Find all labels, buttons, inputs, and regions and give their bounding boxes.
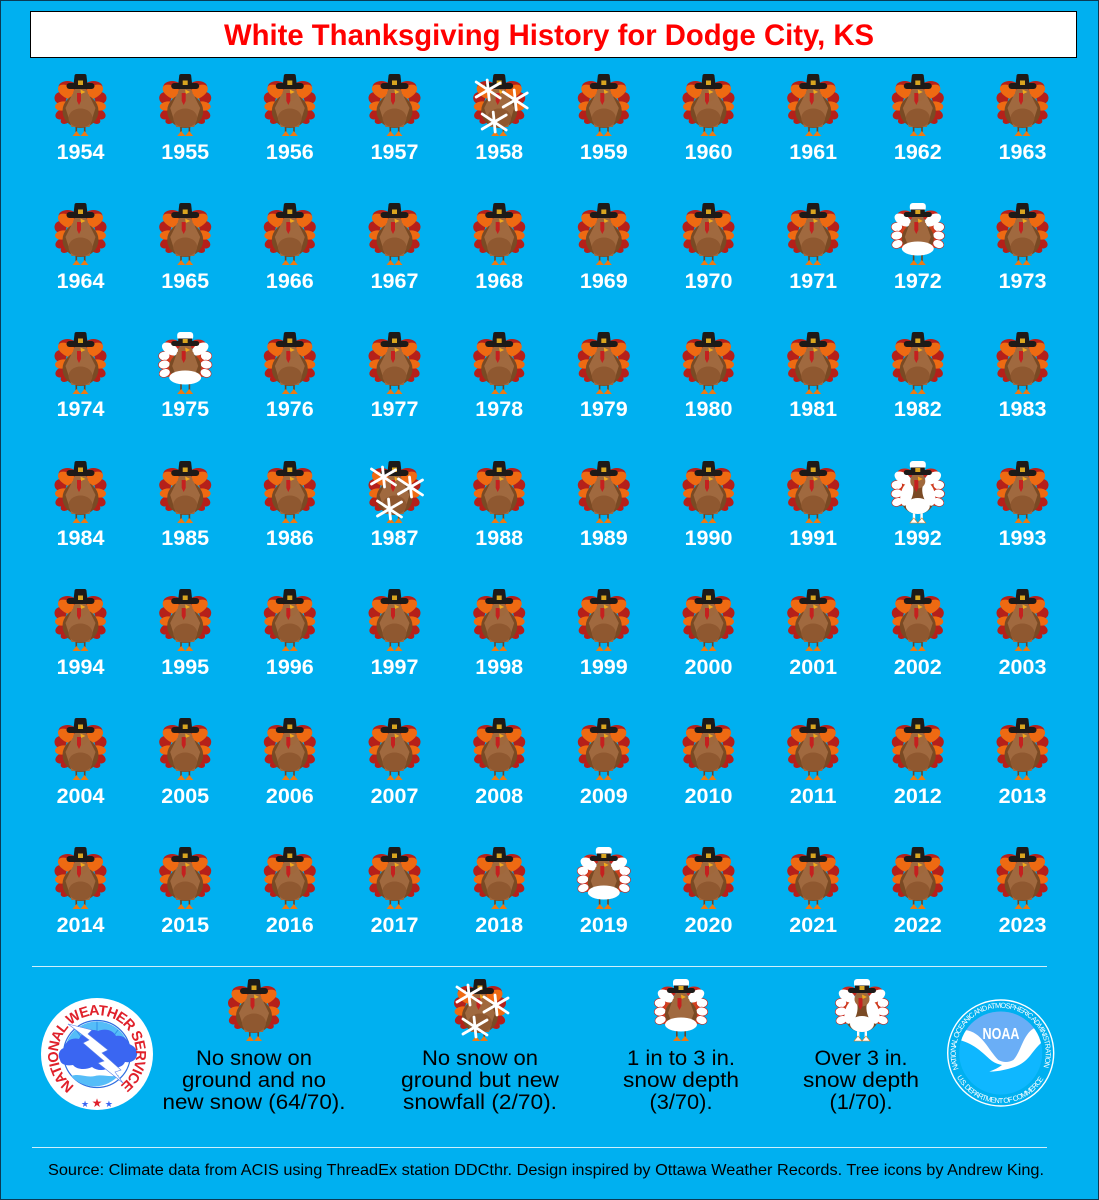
2006 no snow: 2006: [266, 784, 314, 808]
2008 no snow: [472, 718, 526, 808]
1974 no snow: [54, 332, 107, 421]
1991 no snow: 1991: [789, 526, 837, 550]
2010 no snow: [682, 718, 735, 808]
2002 no snow: 2002: [894, 655, 942, 679]
1981 no snow: 1981: [789, 397, 837, 421]
1981 no snow: [786, 332, 840, 421]
1955 no snow: 1955: [161, 140, 209, 164]
1982 no snow: [891, 332, 945, 421]
1974 no snow: 1974: [57, 397, 104, 421]
1969 no snow: [577, 203, 631, 293]
2015 no snow: [158, 847, 212, 937]
1957 no snow: 1957: [371, 140, 418, 164]
2021 no snow: [786, 847, 840, 937]
legend: no snow: No snow on: [196, 1046, 312, 1070]
NWS ring text: NATIONAL WEATHER SERVICE: [48, 1005, 146, 1093]
1987 new snowfall: [368, 461, 422, 550]
1968 no snow: [472, 203, 526, 293]
1992 snow depth over 3 in: 1992: [894, 526, 942, 550]
NWS cloud: [59, 1030, 137, 1070]
logo: NOAA: [947, 999, 1054, 1107]
2019 snow depth 1 to 3 in: [576, 847, 631, 937]
1961 no snow: [786, 74, 840, 164]
2011 no snow: [786, 718, 840, 808]
2008 no snow: 2008: [475, 784, 523, 808]
1970 no snow: 1970: [685, 269, 732, 293]
2020 no snow: 2020: [685, 913, 732, 937]
logo: National Weather Service: [41, 998, 153, 1110]
1972 snow depth 1 to 3 in: [890, 203, 945, 293]
1980 no snow: [682, 332, 735, 421]
1991 no snow: [786, 461, 840, 550]
1978 no snow: [472, 332, 526, 421]
2001 no snow: [786, 589, 840, 679]
2001 no snow: 2001: [789, 655, 837, 679]
legend: new snowfall: ground but new: [401, 1068, 559, 1092]
1973 no snow: 1973: [999, 269, 1046, 293]
1966 no snow: [263, 203, 317, 293]
legend: [162, 979, 919, 1114]
2014 no snow: 2014: [57, 913, 104, 937]
2013 no snow: 2013: [999, 784, 1046, 808]
2023 no snow: 2023: [999, 913, 1046, 937]
1995 no snow: [158, 589, 212, 679]
legend: no snow: ground and no: [182, 1068, 326, 1092]
2004 no snow: [54, 718, 107, 808]
1970 no snow: [682, 203, 735, 293]
2013 no snow: [996, 718, 1049, 808]
1966 no snow: 1966: [266, 269, 314, 293]
legend: over 3 inches: (1/70).: [830, 1090, 892, 1114]
1956 no snow: 1956: [266, 140, 314, 164]
2006 no snow: [263, 718, 317, 808]
1979 no snow: 1979: [580, 397, 628, 421]
1988 no snow: [472, 461, 526, 550]
legend: 1 to 3 inches: snow depth: [623, 1068, 739, 1092]
NOAA wordmark: NOAA: [982, 1026, 1020, 1043]
1967 no snow: 1967: [371, 269, 418, 293]
2016 no snow: [263, 847, 317, 937]
1985 no snow: [158, 461, 212, 550]
2005 no snow: 2005: [161, 784, 209, 808]
1993 no snow: 1993: [999, 526, 1046, 550]
1965 no snow: 1965: [161, 269, 209, 293]
1984 no snow: [54, 461, 107, 550]
1999 no snow: 1999: [580, 655, 628, 679]
1977 no snow: 1977: [371, 397, 418, 421]
1979 no snow: [577, 332, 631, 421]
1996 no snow: 1996: [266, 655, 314, 679]
2017 no snow: [368, 847, 421, 937]
2009 no snow: 2009: [580, 784, 628, 808]
1968 no snow: 1968: [475, 269, 523, 293]
1967 no snow: [368, 203, 421, 293]
2012 no snow: [891, 718, 945, 808]
2011 no snow: 2011: [790, 784, 837, 808]
1999 no snow: [577, 589, 631, 679]
legend: over 3 inches: Over 3 in.: [814, 1046, 908, 1070]
2020 no snow: [682, 847, 735, 937]
title: White Thanksgiving History for Dodge City, KS: [224, 19, 874, 52]
legend: new snowfall: No snow on: [422, 1046, 538, 1070]
1964 no snow: 1964: [57, 269, 104, 293]
2007 no snow: [368, 718, 421, 808]
1993 no snow: [996, 461, 1049, 550]
1989 no snow: [577, 461, 631, 550]
2000 no snow: [682, 589, 735, 679]
1978 no snow: 1978: [475, 397, 523, 421]
legend: over 3 inches: snow depth: [803, 1068, 919, 1092]
NWS lightning: [68, 1024, 123, 1083]
logo: NOAA: U.S. DEPARTMENT OF COMMERCE: [958, 1074, 1044, 1104]
2007 no snow: 2007: [371, 784, 418, 808]
1954 no snow: 1954: [57, 140, 104, 164]
2015 no snow: 2015: [161, 913, 209, 937]
1976 no snow: 1976: [266, 397, 314, 421]
1992 snow depth over 3 in: [890, 461, 945, 550]
2003 no snow: [996, 589, 1049, 679]
1975 snow depth 1 to 3 in: [158, 332, 213, 421]
1983 no snow: 1983: [999, 397, 1046, 421]
1997 no snow: 1997: [371, 655, 418, 679]
1963 no snow: [996, 74, 1049, 164]
1975 snow depth 1 to 3 in: 1975: [161, 397, 209, 421]
1957 no snow: [368, 74, 421, 164]
1956 no snow: [263, 74, 317, 164]
2018 no snow: 2018: [475, 913, 523, 937]
2019 snow depth 1 to 3 in: 2019: [580, 913, 628, 937]
2022 no snow: 2022: [894, 913, 942, 937]
1982 no snow: 1982: [894, 397, 942, 421]
1959 no snow: [577, 74, 631, 164]
1998 no snow: [472, 589, 526, 679]
1984 no snow: 1984: [57, 526, 104, 550]
2021 no snow: 2021: [789, 913, 837, 937]
1971 no snow: [786, 203, 840, 293]
1986 no snow: [263, 461, 317, 550]
1976 no snow: [263, 332, 317, 421]
1996 no snow: [263, 589, 317, 679]
1960 no snow: 1960: [685, 140, 732, 164]
source note: Source: Climate data from ACIS using ThreadEx station DDCthr. Design inspired by Ottawa Weather Records. Tree icons by Andrew King.: [48, 1162, 1044, 1179]
NWS stars: ★ ★ ★: [81, 1096, 113, 1110]
2016 no snow: 2016: [266, 913, 314, 937]
1988 no snow: 1988: [475, 526, 523, 550]
1965 no snow: [158, 203, 212, 293]
legend: 1 to 3 inches: (3/70).: [650, 1090, 712, 1114]
2009 no snow: [577, 718, 631, 808]
1971 no snow: 1971: [789, 269, 837, 293]
NOAA ring text: NATIONAL OCEANIC AND ATMOSPHERIC ADMINISTRATION: [950, 1002, 1051, 1070]
title: [30, 12, 1076, 58]
1961 no snow: 1961: [789, 140, 837, 164]
1985 no snow: 1985: [161, 526, 209, 550]
1994 no snow: [54, 589, 107, 679]
1997 no snow: [368, 589, 421, 679]
1969 no snow: 1969: [580, 269, 628, 293]
NOAA upper field: [966, 1012, 1039, 1062]
2012 no snow: 2012: [894, 784, 942, 808]
2003 no snow: 2003: [999, 655, 1046, 679]
legend: over 3 inches: [803, 979, 919, 1114]
legend: no snow: new snow (64/70).: [162, 1090, 346, 1114]
1990 no snow: 1990: [685, 526, 732, 550]
1958 new snowfall: 1958: [475, 140, 523, 164]
2000 no snow: 2000: [685, 655, 732, 679]
1958 new snowfall: [472, 74, 527, 164]
1959 no snow: 1959: [580, 140, 628, 164]
2010 no snow: 2010: [685, 784, 732, 808]
legend: 1 to 3 inches: 1 in to 3 in.: [627, 1046, 735, 1070]
1987 new snowfall: 1987: [371, 526, 418, 550]
1986 no snow: 1986: [266, 526, 314, 550]
legend: new snowfall: snowfall (2/70).: [403, 1090, 557, 1114]
2023 no snow: [996, 847, 1049, 937]
2002 no snow: [891, 589, 945, 679]
legend: new snowfall: [401, 979, 559, 1114]
2022 no snow: [891, 847, 945, 937]
turkey grid: [54, 74, 1049, 937]
2014 no snow: [54, 847, 107, 937]
2017 no snow: 2017: [371, 913, 418, 937]
1962 no snow: 1962: [894, 140, 942, 164]
1972 snow depth 1 to 3 in: 1972: [894, 269, 942, 293]
1962 no snow: [891, 74, 945, 164]
1963 no snow: 1963: [999, 140, 1046, 164]
1954 no snow: [54, 74, 107, 164]
legend: no snow: [162, 979, 346, 1114]
1983 no snow: [996, 332, 1049, 421]
1989 no snow: 1989: [580, 526, 628, 550]
2005 no snow: [158, 718, 212, 808]
1960 no snow: [682, 74, 735, 164]
NOAA bird: [961, 1028, 1041, 1072]
1998 no snow: 1998: [475, 655, 523, 679]
1994 no snow: 1994: [57, 655, 104, 679]
1977 no snow: [368, 332, 421, 421]
1964 no snow: [54, 203, 107, 293]
1955 no snow: [158, 74, 212, 164]
2018 no snow: [472, 847, 526, 937]
2004 no snow: 2004: [57, 784, 104, 808]
1990 no snow: [682, 461, 735, 550]
legend: 1 to 3 inches: [623, 979, 739, 1114]
1995 no snow: 1995: [161, 655, 209, 679]
1973 no snow: [996, 203, 1049, 293]
1980 no snow: 1980: [685, 397, 732, 421]
